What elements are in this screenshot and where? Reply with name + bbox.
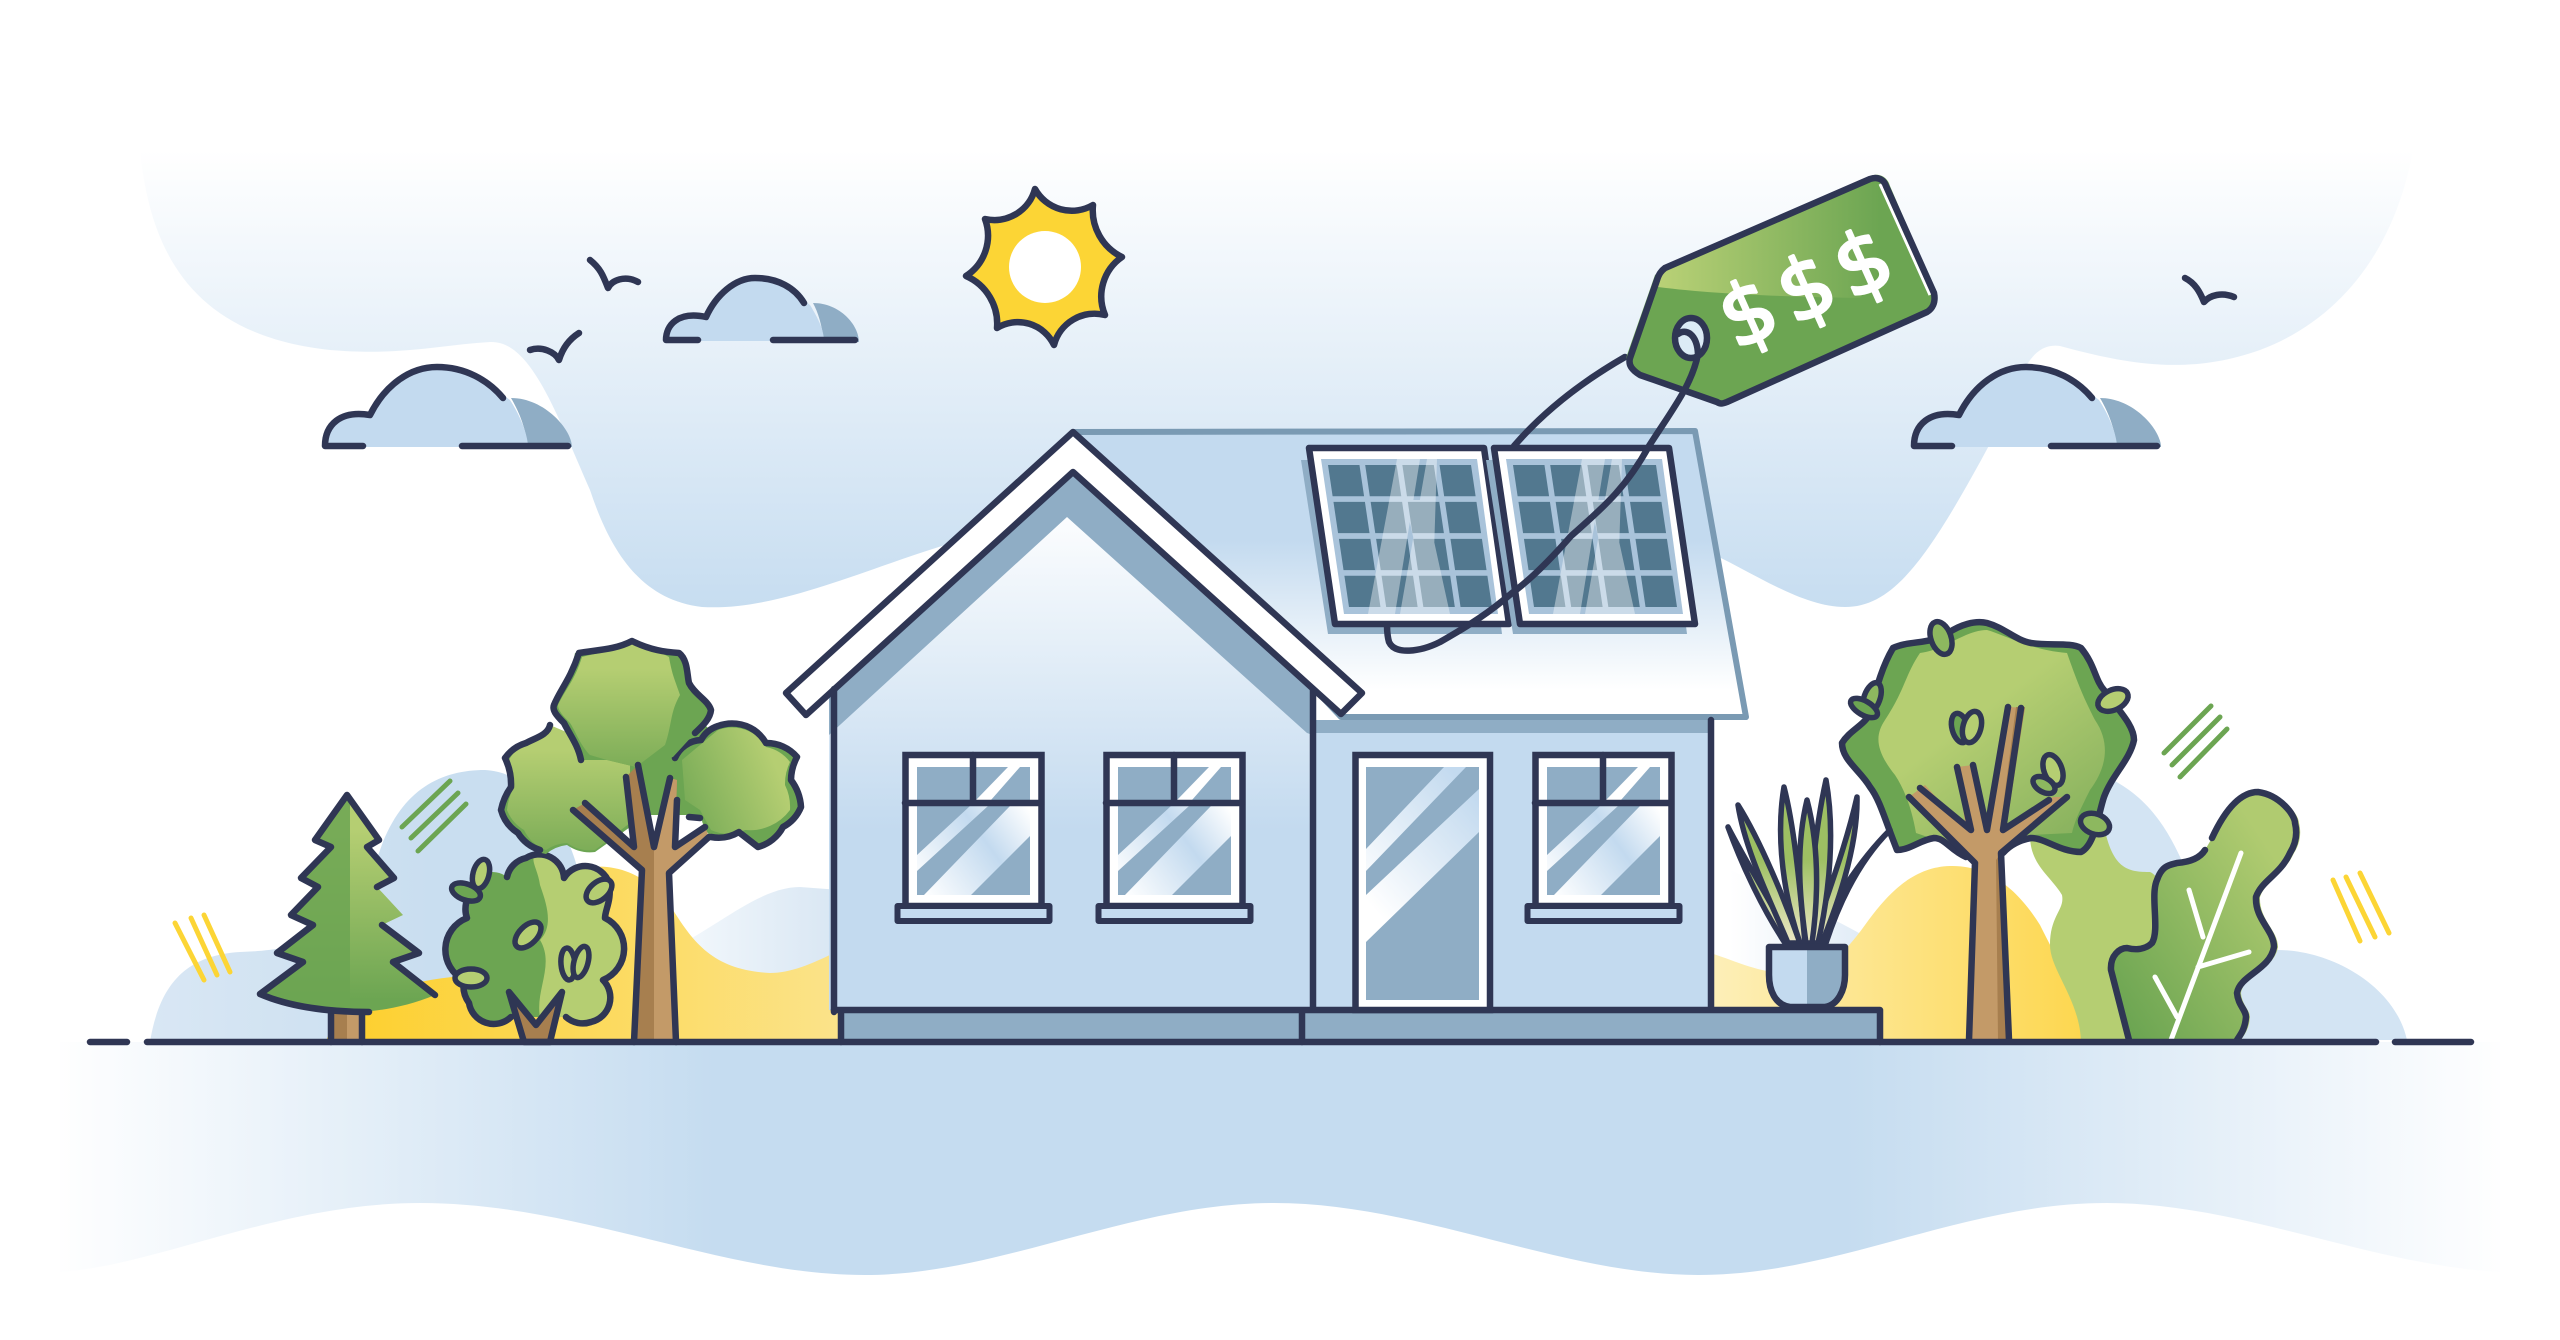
background hills left xyxy=(150,770,840,1042)
gable wall xyxy=(829,472,1313,1010)
solar panel right xyxy=(1486,448,1695,634)
tag edge light xyxy=(1880,184,1930,295)
dollar signs: $ xyxy=(1819,207,1907,319)
price tag xyxy=(1626,175,1937,405)
price tag string back xyxy=(1514,357,1625,446)
cloud right xyxy=(1914,367,2161,447)
bush xyxy=(445,854,624,1042)
gable shadow xyxy=(829,472,1313,735)
blades xyxy=(1728,780,1890,943)
cloud left xyxy=(325,367,572,447)
leaf veins xyxy=(2155,853,2249,1040)
right tree xyxy=(1842,619,2134,1040)
crown leaves xyxy=(1848,619,2132,839)
hole xyxy=(1674,319,1704,357)
ground band xyxy=(60,1042,2500,1275)
background hills right xyxy=(1700,779,2407,1042)
leafy plant xyxy=(2111,792,2300,1040)
crown outline xyxy=(1842,622,2134,857)
window 1 xyxy=(898,755,1050,921)
tall tree left xyxy=(499,641,801,1042)
window 2 xyxy=(1098,755,1250,921)
bush trunk xyxy=(509,992,562,1042)
tag body xyxy=(1626,175,1937,405)
birds xyxy=(530,260,2234,360)
tag outline xyxy=(1629,178,1935,404)
step xyxy=(834,1010,1880,1042)
trunk xyxy=(1909,707,2067,1040)
main roof xyxy=(1073,431,1746,717)
cloud middle xyxy=(666,278,859,342)
centre dark foliage xyxy=(590,720,715,845)
wall outlines xyxy=(834,689,1711,1012)
top crown xyxy=(552,641,711,767)
price tag string front xyxy=(1387,332,1698,651)
right crown xyxy=(675,723,801,847)
trunk xyxy=(573,765,709,1042)
crown light xyxy=(1878,630,2105,850)
sun xyxy=(966,189,1122,345)
potted plant xyxy=(1728,780,1890,1007)
solar panel left xyxy=(1301,448,1509,634)
pine tree xyxy=(260,795,435,1042)
dollar signs xyxy=(1704,207,1907,369)
house xyxy=(786,431,1880,1042)
left small marks xyxy=(175,781,466,980)
gable fascia xyxy=(786,432,1362,715)
door xyxy=(1356,755,1490,1010)
eave shadow xyxy=(1313,720,1711,733)
dollar signs: $ xyxy=(1762,232,1850,344)
pot xyxy=(1769,947,1845,1007)
dollar signs: $ xyxy=(1704,257,1792,369)
tag highlight xyxy=(1658,178,1905,298)
ground line xyxy=(90,1039,2471,1045)
left crown xyxy=(499,725,640,854)
right small marks xyxy=(2164,706,2389,941)
crown xyxy=(1842,622,2134,857)
bush leaves xyxy=(449,857,616,987)
window 3 xyxy=(1528,755,1680,921)
right wing wall xyxy=(1313,720,1711,1010)
sky background shape xyxy=(140,150,2413,607)
